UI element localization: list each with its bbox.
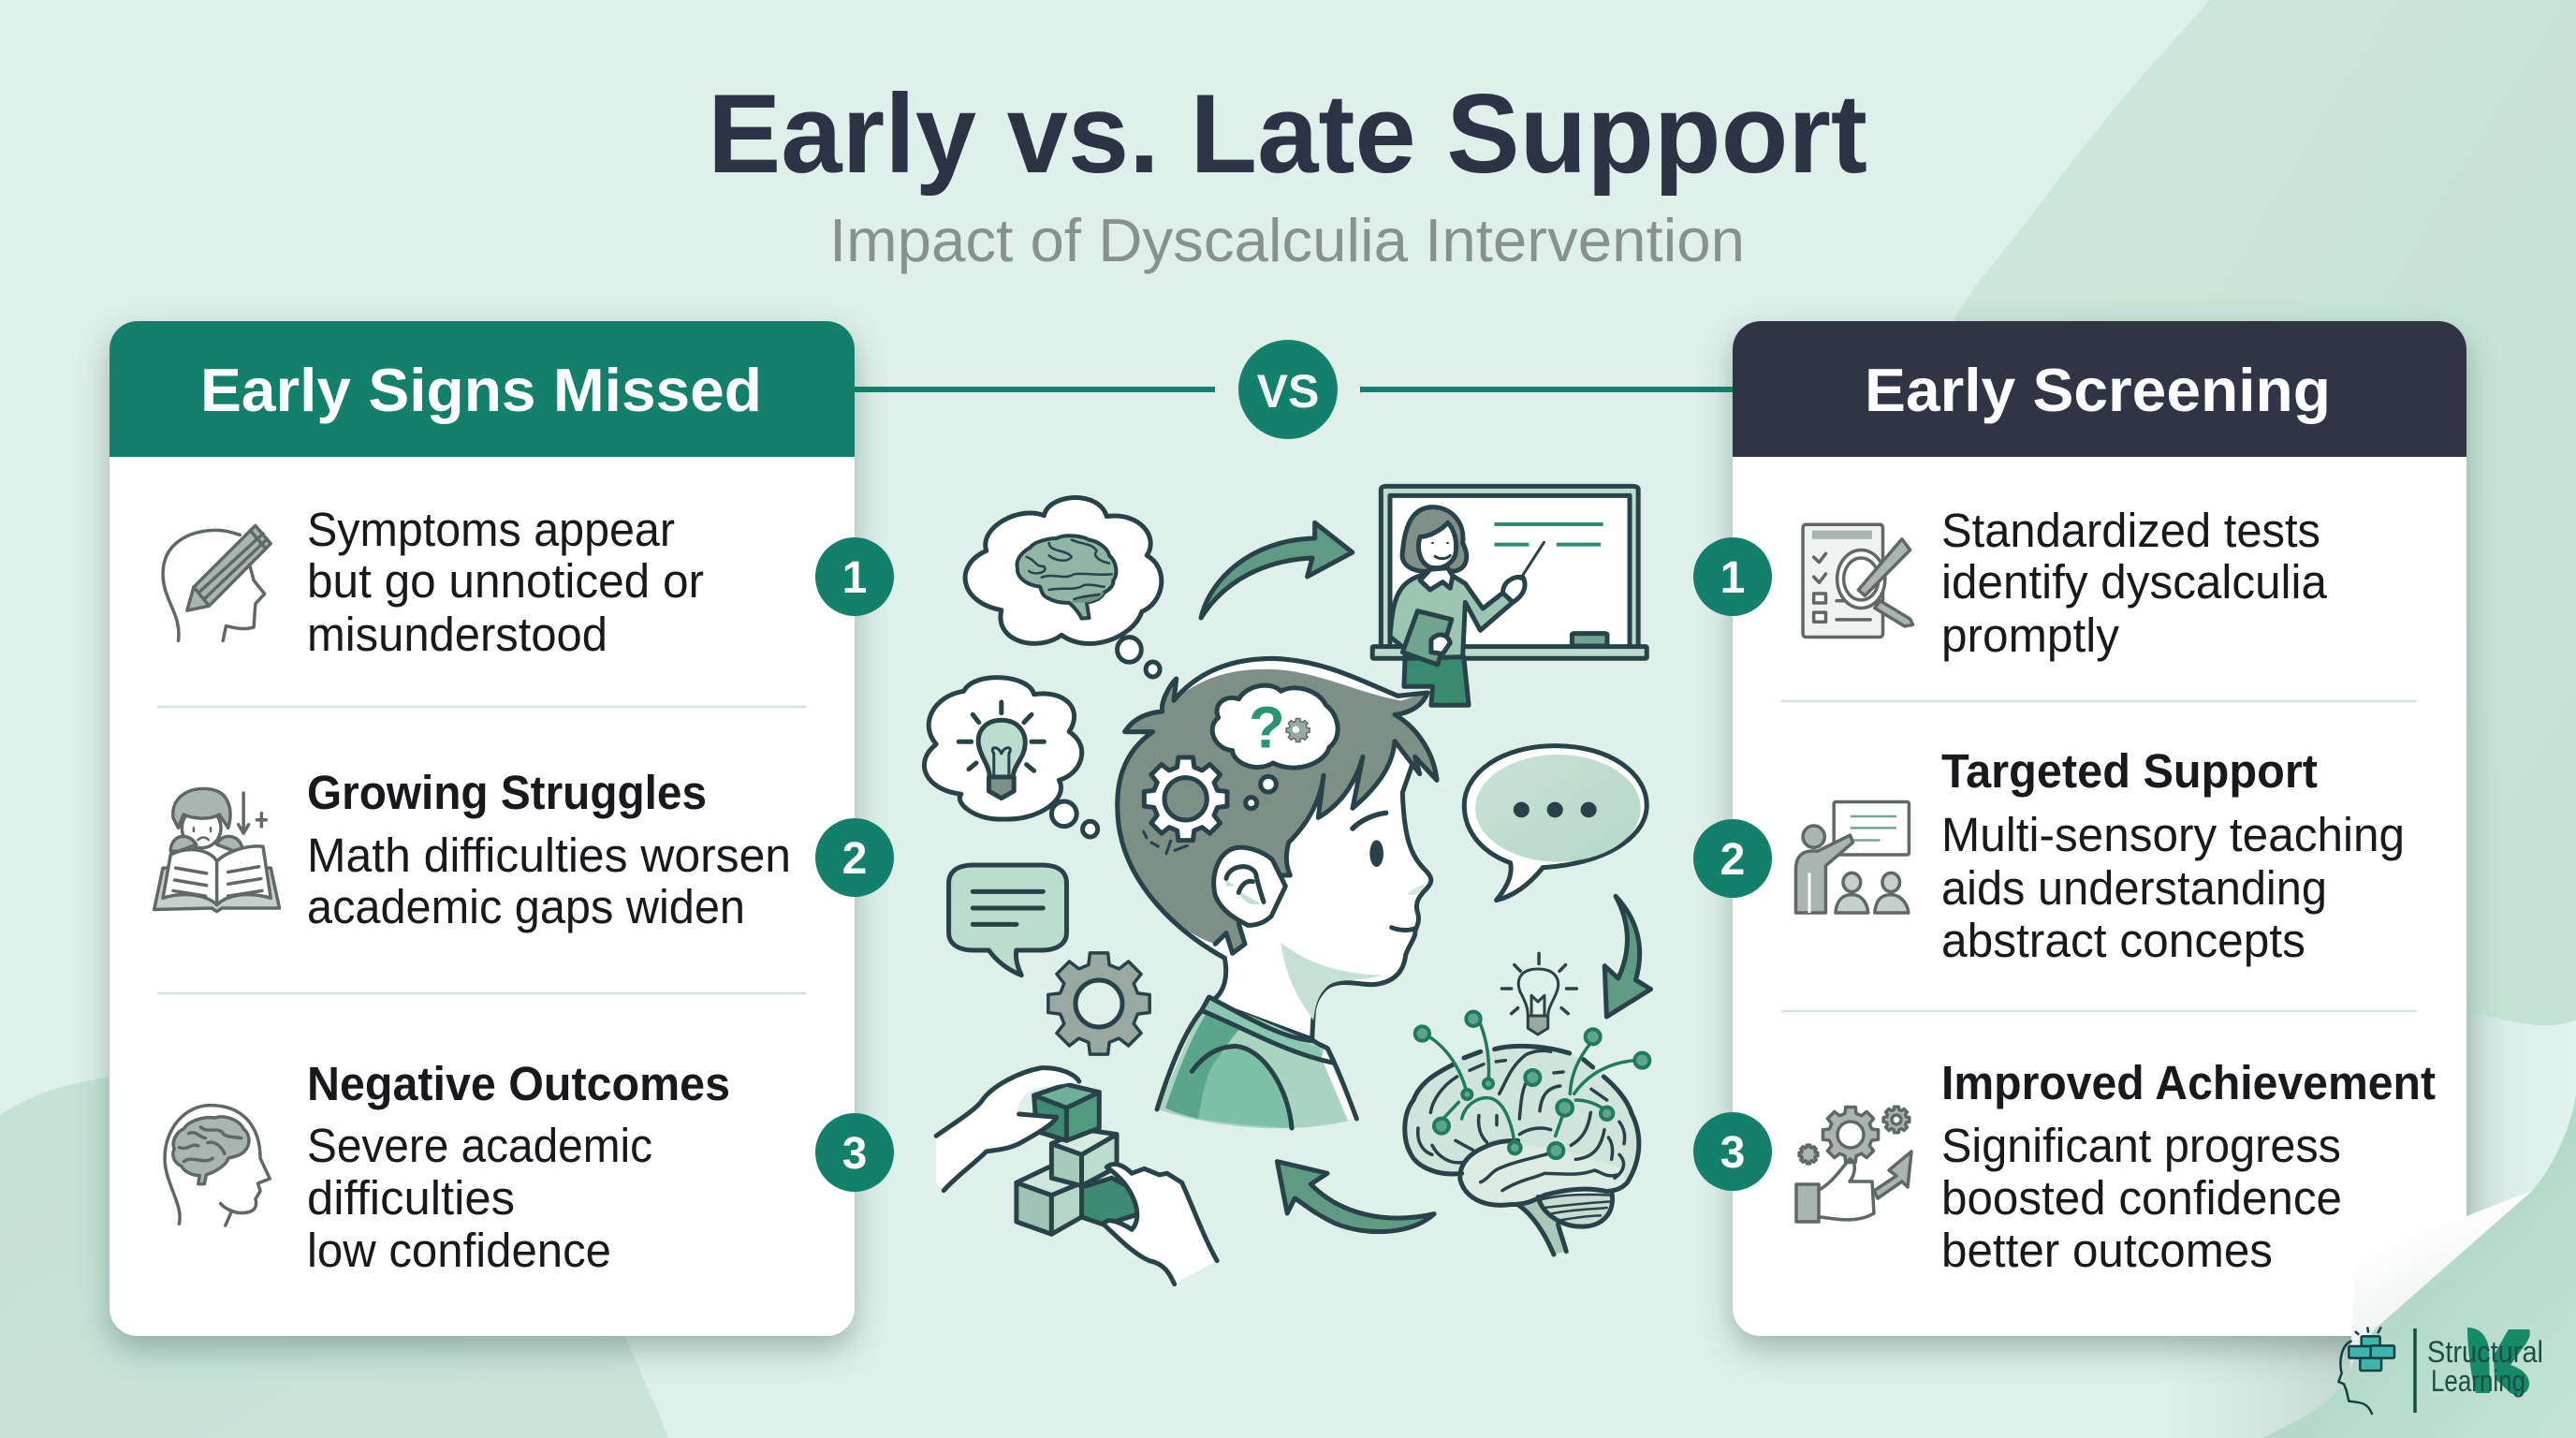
icon: head with brain: [165, 1106, 270, 1225]
hands stacking blocks: [936, 1068, 1217, 1284]
thought cloud in hair: [1212, 685, 1338, 768]
gear: [1048, 953, 1149, 1054]
text: negative outcomes: low confidence: [307, 1224, 611, 1277]
gear in hair: [1144, 757, 1227, 854]
icon: small light bulb: [1501, 953, 1576, 1034]
panel header: early signs missed: [110, 321, 855, 457]
connector: vs divider: VS: [1257, 365, 1319, 418]
text: improved achievement: [1941, 1056, 2436, 1277]
text: growing struggles: [307, 766, 791, 933]
badge: right 3: 3: [1720, 1128, 1745, 1178]
badge: left 3: [815, 1113, 894, 1192]
icon: head with pencil: [163, 525, 271, 640]
arrow: down to brain: [1604, 896, 1651, 1017]
logo wordmark: Structural: [2427, 1335, 2543, 1369]
text: targeted support: [1941, 744, 2405, 967]
arrow: back to boy: [1277, 1162, 1434, 1232]
badge: right 2: [1693, 819, 1772, 898]
logo wordmark: [2427, 1335, 2543, 1398]
text: improved achievement: better outcomes: [1941, 1224, 2273, 1277]
speech bubble with lines: [949, 865, 1066, 976]
badge: left 3: 3: [842, 1129, 867, 1179]
panel header: early screening: [1733, 321, 2466, 457]
text: standardized tests: identify dyscalculia: [1941, 555, 2328, 609]
icon: child with open book: [154, 788, 280, 912]
panel header: early signs missed: Early Signs Missed: [200, 356, 762, 424]
logo wordmark: Learning: [2431, 1364, 2525, 1398]
text: negative outcomes: Negative Outcomes: [307, 1057, 730, 1110]
text: standardized tests: [1941, 504, 2328, 662]
arrow: to teacher: [1201, 522, 1353, 618]
thought dots in hair: [1246, 776, 1276, 809]
badge: right 1: [1693, 537, 1772, 616]
badge: left 1: 1: [842, 553, 867, 603]
central illustration: upper zone: [924, 486, 1647, 901]
logo mark: k shape: [2467, 1328, 2530, 1395]
brain with neural connections: [1405, 1012, 1649, 1255]
thought cloud with light bulb: [924, 678, 1098, 837]
text: targeted support: aids understanding: [1941, 861, 2327, 915]
text: symptoms appear: Symptoms appear: [307, 503, 675, 556]
text: standardized tests: Standardized tests: [1941, 504, 2320, 557]
text: negative outcomes: [307, 1057, 730, 1277]
text: symptoms appear: [307, 503, 704, 661]
text: growing struggles: Growing Struggles: [307, 766, 707, 819]
icon: teacher with students: [1795, 801, 1909, 913]
central illustration: lower zone: [936, 865, 1651, 1284]
badge: left 2: [815, 818, 894, 897]
subtitle: Impact of Dyscalculia Intervention: [829, 206, 1745, 274]
badge: right 1: 1: [1720, 553, 1745, 603]
text: improved achievement: Improved Achievement: [1941, 1056, 2436, 1109]
connector: vs divider: [855, 340, 1733, 439]
thought bubbles: [1118, 638, 1160, 677]
text: targeted support: abstract concepts: [1941, 914, 2305, 967]
text: targeted support: Targeted Support: [1941, 744, 2318, 798]
text: symptoms appear: misunderstood: [307, 608, 607, 661]
boy: hair: [1118, 669, 1437, 953]
text: negative outcomes: Severe academic: [307, 1119, 652, 1172]
title: Early vs. Late Support: [708, 71, 1867, 197]
speech bubble with dots: [1464, 746, 1647, 901]
logo mark: head with bricks: [2338, 1328, 2394, 1414]
panel header: early screening: Early Screening: [1865, 356, 2331, 424]
text: symptoms appear: but go unnoticed or: [307, 554, 704, 608]
badge: left 1: [815, 537, 894, 616]
badge: left 2: 2: [842, 834, 867, 884]
badge: right 2: 2: [1720, 835, 1745, 885]
text: growing struggles: Math difficulties worsen: [307, 829, 791, 882]
thought cloud in hair: ?: [1249, 695, 1285, 760]
boy: shirt: [1157, 997, 1356, 1128]
boy: ear: [1214, 847, 1285, 925]
text: growing struggles: academic gaps widen: [307, 880, 745, 933]
thought cloud with brain: [965, 498, 1162, 644]
icon: checklist with magnifier: [1803, 524, 1912, 637]
text: improved achievement: Significant progress: [1941, 1119, 2341, 1172]
icon: gears and thumbs up: [1796, 1107, 1911, 1222]
text: negative outcomes: difficulties: [307, 1171, 515, 1225]
boy: neck and face: [1118, 658, 1437, 1039]
logo: structural learning: [2338, 1328, 2543, 1414]
badge: right 3: [1693, 1112, 1772, 1191]
boy: facial features: [1353, 813, 1426, 931]
text: targeted support: Multi-sensory teaching: [1941, 808, 2405, 861]
text: standardized tests: promptly: [1941, 609, 2119, 662]
page curl corner: [2262, 1095, 2576, 1438]
whiteboard with teacher: [1372, 486, 1647, 705]
text: improved achievement: boosted confidence: [1941, 1171, 2342, 1225]
panel: early screening: [1693, 321, 2466, 1336]
panel: early signs missed: [110, 321, 894, 1336]
